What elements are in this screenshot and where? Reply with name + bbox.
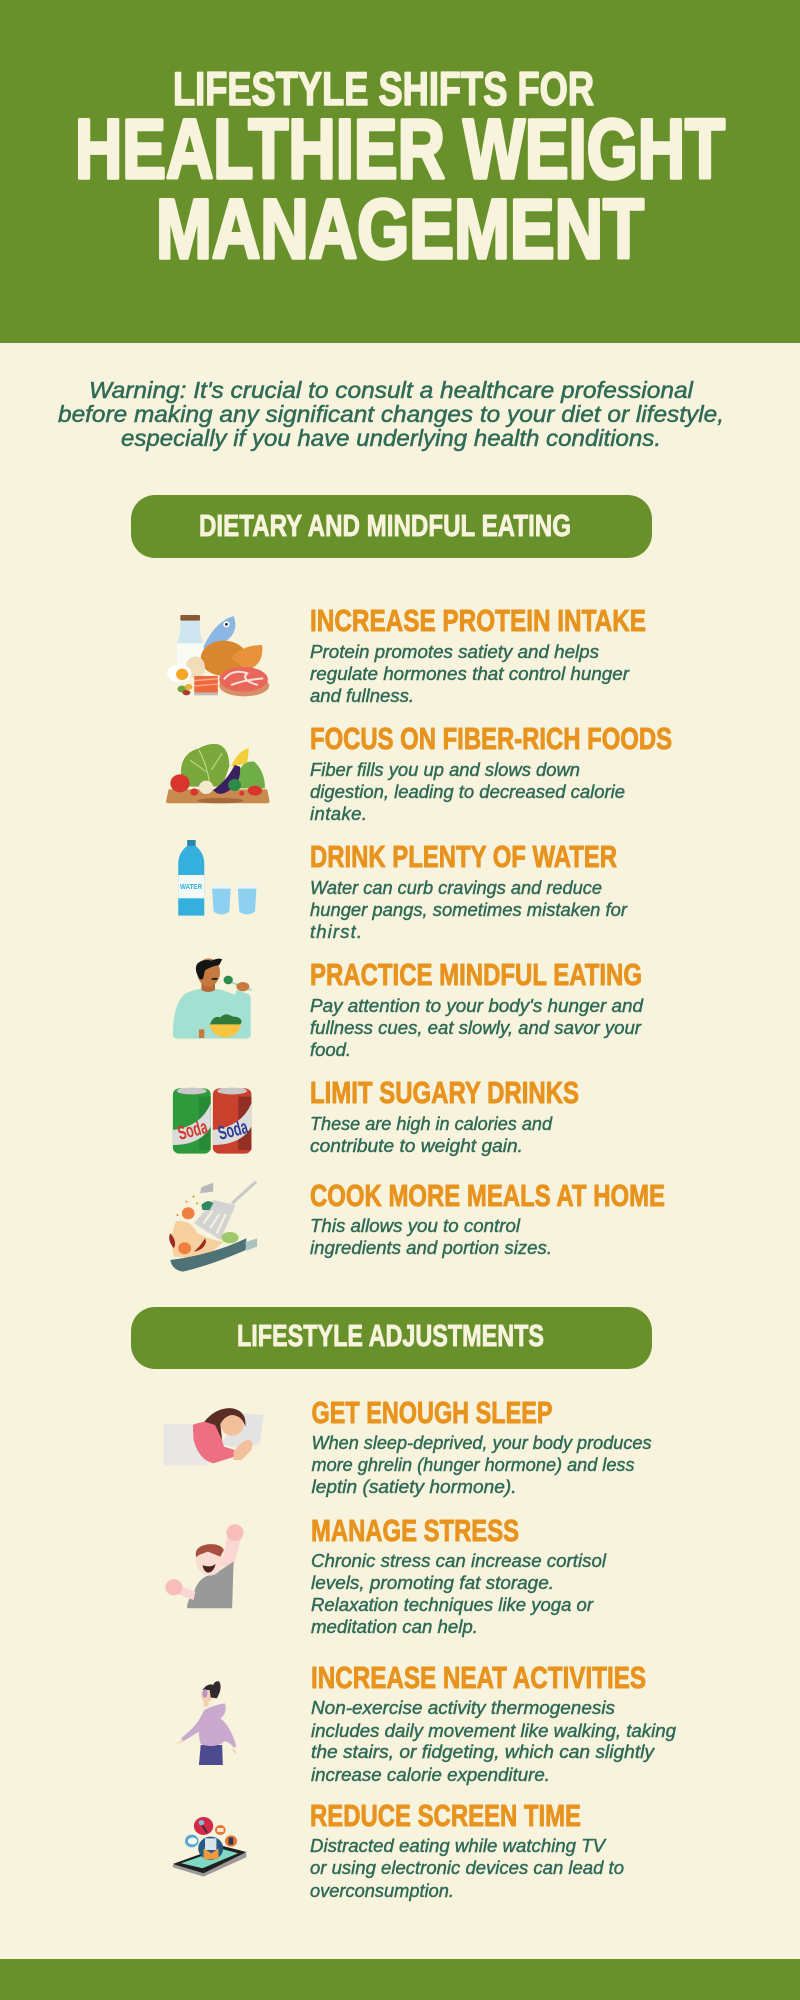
icon: walking woman <box>176 1681 237 1765</box>
description: intake. <box>310 803 367 824</box>
heading: LIMIT SUGARY DRINKS <box>310 1075 579 1110</box>
description <box>310 995 644 1060</box>
description: Protein promotes satiety and helps <box>310 641 599 662</box>
item: drink plenty of water <box>178 839 628 942</box>
description: Chronic stress can increase cortisol <box>311 1550 607 1571</box>
icon: water bottle and glasses: WATER <box>180 882 203 891</box>
description <box>312 1432 652 1497</box>
item: increase protein intake <box>167 603 646 706</box>
icon: frying pan with spatula <box>169 1182 257 1272</box>
description: hunger pangs, sometimes mistaken for <box>310 899 628 920</box>
description <box>310 641 630 706</box>
description: increase calorie expenditure. <box>311 1764 550 1785</box>
warning text: Warning: It's crucial to consult a healthcare professional <box>89 377 694 403</box>
description: thirst. <box>310 921 362 942</box>
item: practice mindful eating <box>173 957 644 1060</box>
title: LIFESTYLE SHIFTS FOR <box>173 62 594 115</box>
heading: INCREASE NEAT ACTIVITIES <box>311 1660 646 1695</box>
description: meditation can help. <box>311 1616 478 1637</box>
section heading: lifestyle adjustments: LIFESTYLE ADJUSTMENTS <box>237 1318 544 1353</box>
icon: water bottle and glasses <box>178 840 257 916</box>
item: cook more meals at home <box>169 1178 665 1272</box>
heading: GET ENOUGH SLEEP <box>312 1395 552 1430</box>
section heading: lifestyle adjustments <box>131 1307 652 1369</box>
icon: man eating salad <box>173 958 251 1039</box>
title: MANAGEMENT <box>156 182 644 276</box>
section heading: dietary and mindful eating <box>131 495 652 558</box>
description <box>310 1835 624 1901</box>
icon: soda cans: Soda <box>216 1117 251 1145</box>
title <box>75 62 725 276</box>
description: These are high in calories and <box>310 1113 553 1134</box>
warning text: before making any significant changes to your diet or lifestyle, <box>58 401 724 427</box>
description <box>310 1215 552 1258</box>
heading: REDUCE SCREEN TIME <box>310 1798 581 1833</box>
description <box>310 877 628 942</box>
description: the stairs, or fidgeting, which can slightly <box>311 1741 656 1762</box>
icon: sleeping woman <box>163 1408 264 1466</box>
heading: FOCUS ON FIBER-RICH FOODS <box>310 721 672 756</box>
description <box>310 759 625 824</box>
description: Water can curb cravings and reduce <box>310 877 602 898</box>
description: This allows you to control <box>310 1215 521 1236</box>
description: leptin (satiety hormone). <box>312 1476 516 1497</box>
description: more ghrelin (hunger hormone) and less <box>312 1454 634 1475</box>
description: When sleep-deprived, your body produces <box>312 1432 652 1453</box>
description: levels, promoting fat storage. <box>311 1572 554 1593</box>
description: Distracted eating while watching TV <box>310 1835 607 1856</box>
description: includes daily movement like walking, taking <box>311 1720 677 1741</box>
heading: DRINK PLENTY OF WATER <box>310 839 617 874</box>
heading: INCREASE PROTEIN INTAKE <box>310 603 646 638</box>
footer band <box>0 1959 800 2000</box>
item: get enough sleep <box>163 1395 652 1497</box>
heading: PRACTICE MINDFUL EATING <box>310 957 642 992</box>
heading: COOK MORE MEALS AT HOME <box>310 1178 665 1213</box>
warning text: especially if you have underlying health conditions. <box>121 425 661 451</box>
icon: soda cans: Soda <box>175 1117 211 1145</box>
warning text <box>58 377 724 451</box>
description <box>311 1550 607 1637</box>
description: overconsumption. <box>310 1880 454 1901</box>
icon: vegetables on board <box>166 744 270 803</box>
icon: protein foods <box>167 615 269 696</box>
description: Relaxation techniques like yoga or <box>311 1594 594 1615</box>
header banner <box>0 0 800 343</box>
description: regulate hormones that control hunger <box>310 663 630 684</box>
description: fullness cues, eat slowly, and savor your <box>310 1017 642 1038</box>
item: reduce screen time <box>173 1798 624 1901</box>
description: Non-exercise activity thermogenesis <box>311 1697 615 1718</box>
section heading: dietary and mindful eating: DIETARY AND MINDFUL EATING <box>199 508 571 543</box>
description: Pay attention to your body's hunger and <box>310 995 644 1016</box>
heading: MANAGE STRESS <box>311 1513 519 1548</box>
description: and fullness. <box>310 685 414 706</box>
icon: tablet with app bubbles <box>173 1817 246 1877</box>
item: focus on fiber-rich foods <box>166 721 672 824</box>
description: digestion, leading to decreased calorie <box>310 781 625 802</box>
item: increase neat activities <box>176 1660 677 1785</box>
description: Fiber fills you up and slows down <box>310 759 580 780</box>
icon: cheering man <box>165 1524 244 1608</box>
description: food. <box>310 1039 351 1060</box>
icon: soda cans <box>173 1088 251 1154</box>
item: limit sugary drinks <box>173 1075 579 1156</box>
description <box>310 1113 553 1156</box>
description: ingredients and portion sizes. <box>310 1237 552 1258</box>
description: or using electronic devices can lead to <box>310 1857 624 1878</box>
item: manage stress <box>165 1513 607 1637</box>
description <box>311 1697 677 1785</box>
description: contribute to weight gain. <box>310 1135 523 1156</box>
